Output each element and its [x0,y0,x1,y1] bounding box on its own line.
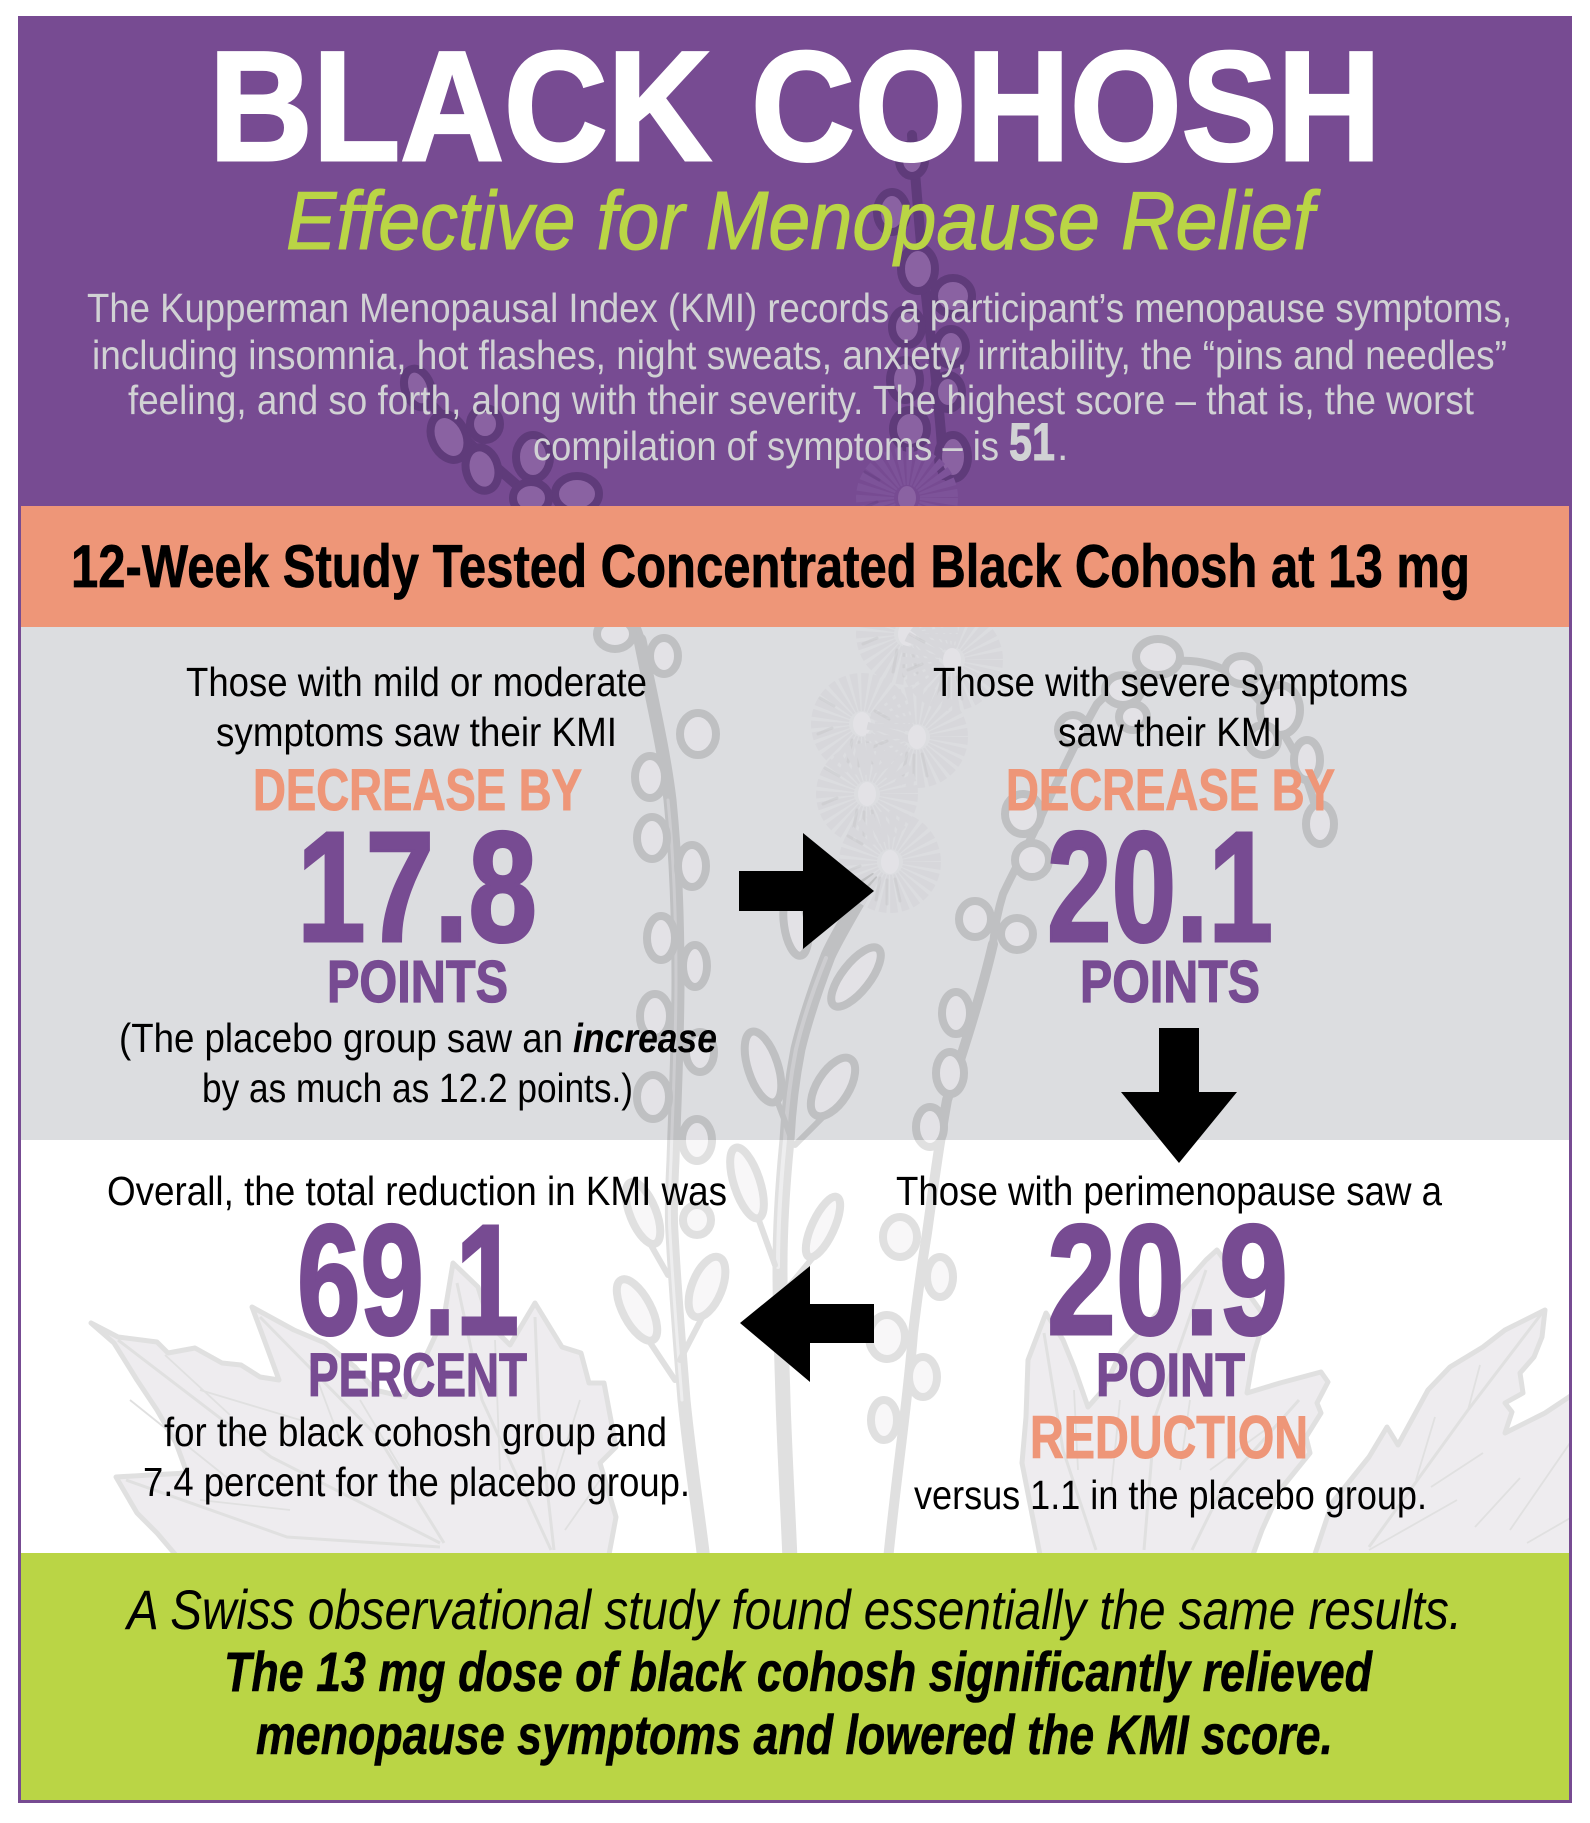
plant illustration on gray [593,627,1338,1140]
panel: mild or moderate symptoms result: increase [573,1015,717,1061]
KMI description paragraph: 51 [1009,413,1055,472]
arrow: down [1121,1028,1237,1163]
panel: perimenopause result [896,1168,1442,1518]
panel: green conclusion [21,1553,1569,1800]
arrow: right [739,833,874,949]
plant illustration in header [400,130,976,506]
panel: overall reduction result: PERCENT [308,1341,527,1409]
panel: severe symptoms result: saw their KMI [1058,709,1282,755]
title: BLACK COHOSH [209,20,1381,194]
panel: mild or moderate symptoms result: (The placebo group saw an [119,1015,563,1061]
subtitle: Effective for Menopause Relief [286,174,1321,267]
panel: severe symptoms result: DECREASE BY [1006,758,1335,823]
number 20.9: 20.9 [1047,1193,1288,1368]
number 20.1: 20.1 [1047,800,1273,975]
panel: severe symptoms result: Those with severe symptoms [933,659,1408,705]
panel: mild or moderate symptoms result: POINTS [327,949,508,1015]
panel: gray results section [21,627,1569,1140]
panel: perimenopause result: POINT [1096,1341,1245,1409]
arrow: left [740,1266,874,1382]
KMI description paragraph: . [1057,423,1068,469]
KMI description paragraph [87,285,1512,472]
number 17.8: 17.8 [297,800,537,975]
panel: mild or moderate symptoms result: DECREASE BY [253,758,582,823]
panel: overall reduction result: 7.4 percent for the placebo group. [143,1459,690,1505]
KMI description paragraph: compilation of symptoms – is [533,423,999,469]
plant illustration on white [88,1140,1569,1553]
panel: overall reduction result: for the black cohosh group and [164,1409,667,1455]
panel: green conclusion: menopause symptoms and lowered the KMI score. [256,1703,1333,1766]
panel: overall reduction result: Overall, the total reduction in KMI was [107,1168,727,1214]
number 69.1: 69.1 [297,1193,519,1368]
panel: perimenopause result: versus 1.1 in the placebo group. [914,1472,1427,1518]
panel: salmon study heading band [21,506,1569,627]
panel: white results section [88,1140,1569,1553]
panel: severe symptoms result: POINTS [1080,949,1260,1015]
panel: mild or moderate symptoms result: Those with mild or moderate [186,659,647,705]
panel: overall reduction result [107,1168,727,1505]
panel: mild or moderate symptoms result: symptoms saw their KMI [216,709,617,755]
panel: severe symptoms result [933,659,1408,1015]
panel: perimenopause result: Those with perimenopause saw a [896,1168,1442,1214]
panel: purple header [21,19,1569,506]
panel: perimenopause result: REDUCTION [1030,1404,1308,1471]
panel: mild or moderate symptoms result: by as much as 12.2 points.) [202,1065,633,1111]
panel: mild or moderate symptoms result [119,659,717,1111]
KMI description paragraph: feeling, and so forth, along with their severity. The highest score – that is, the worst [128,377,1475,423]
